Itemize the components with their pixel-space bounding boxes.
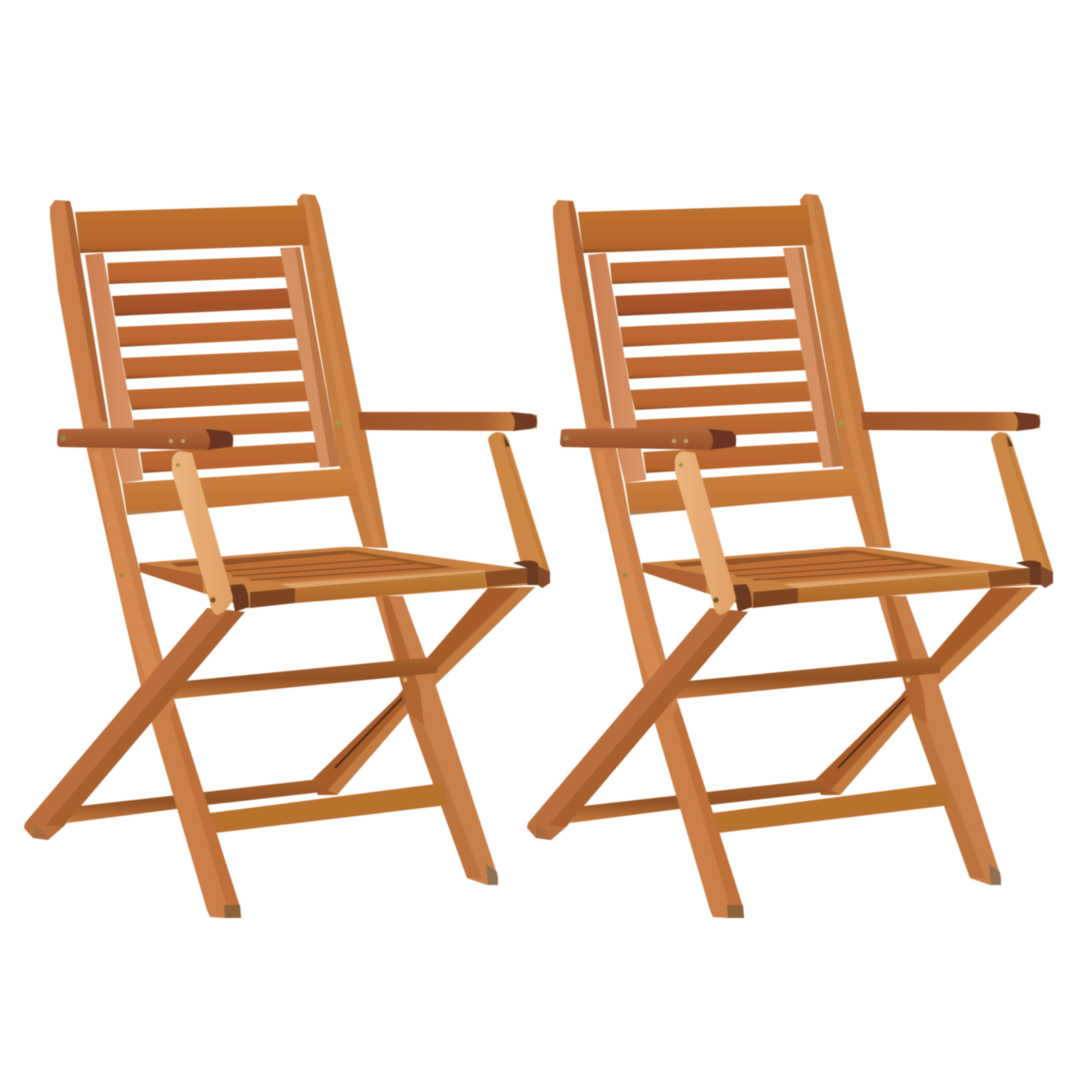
right chair xyxy=(527,194,1053,918)
left chair xyxy=(24,194,550,918)
